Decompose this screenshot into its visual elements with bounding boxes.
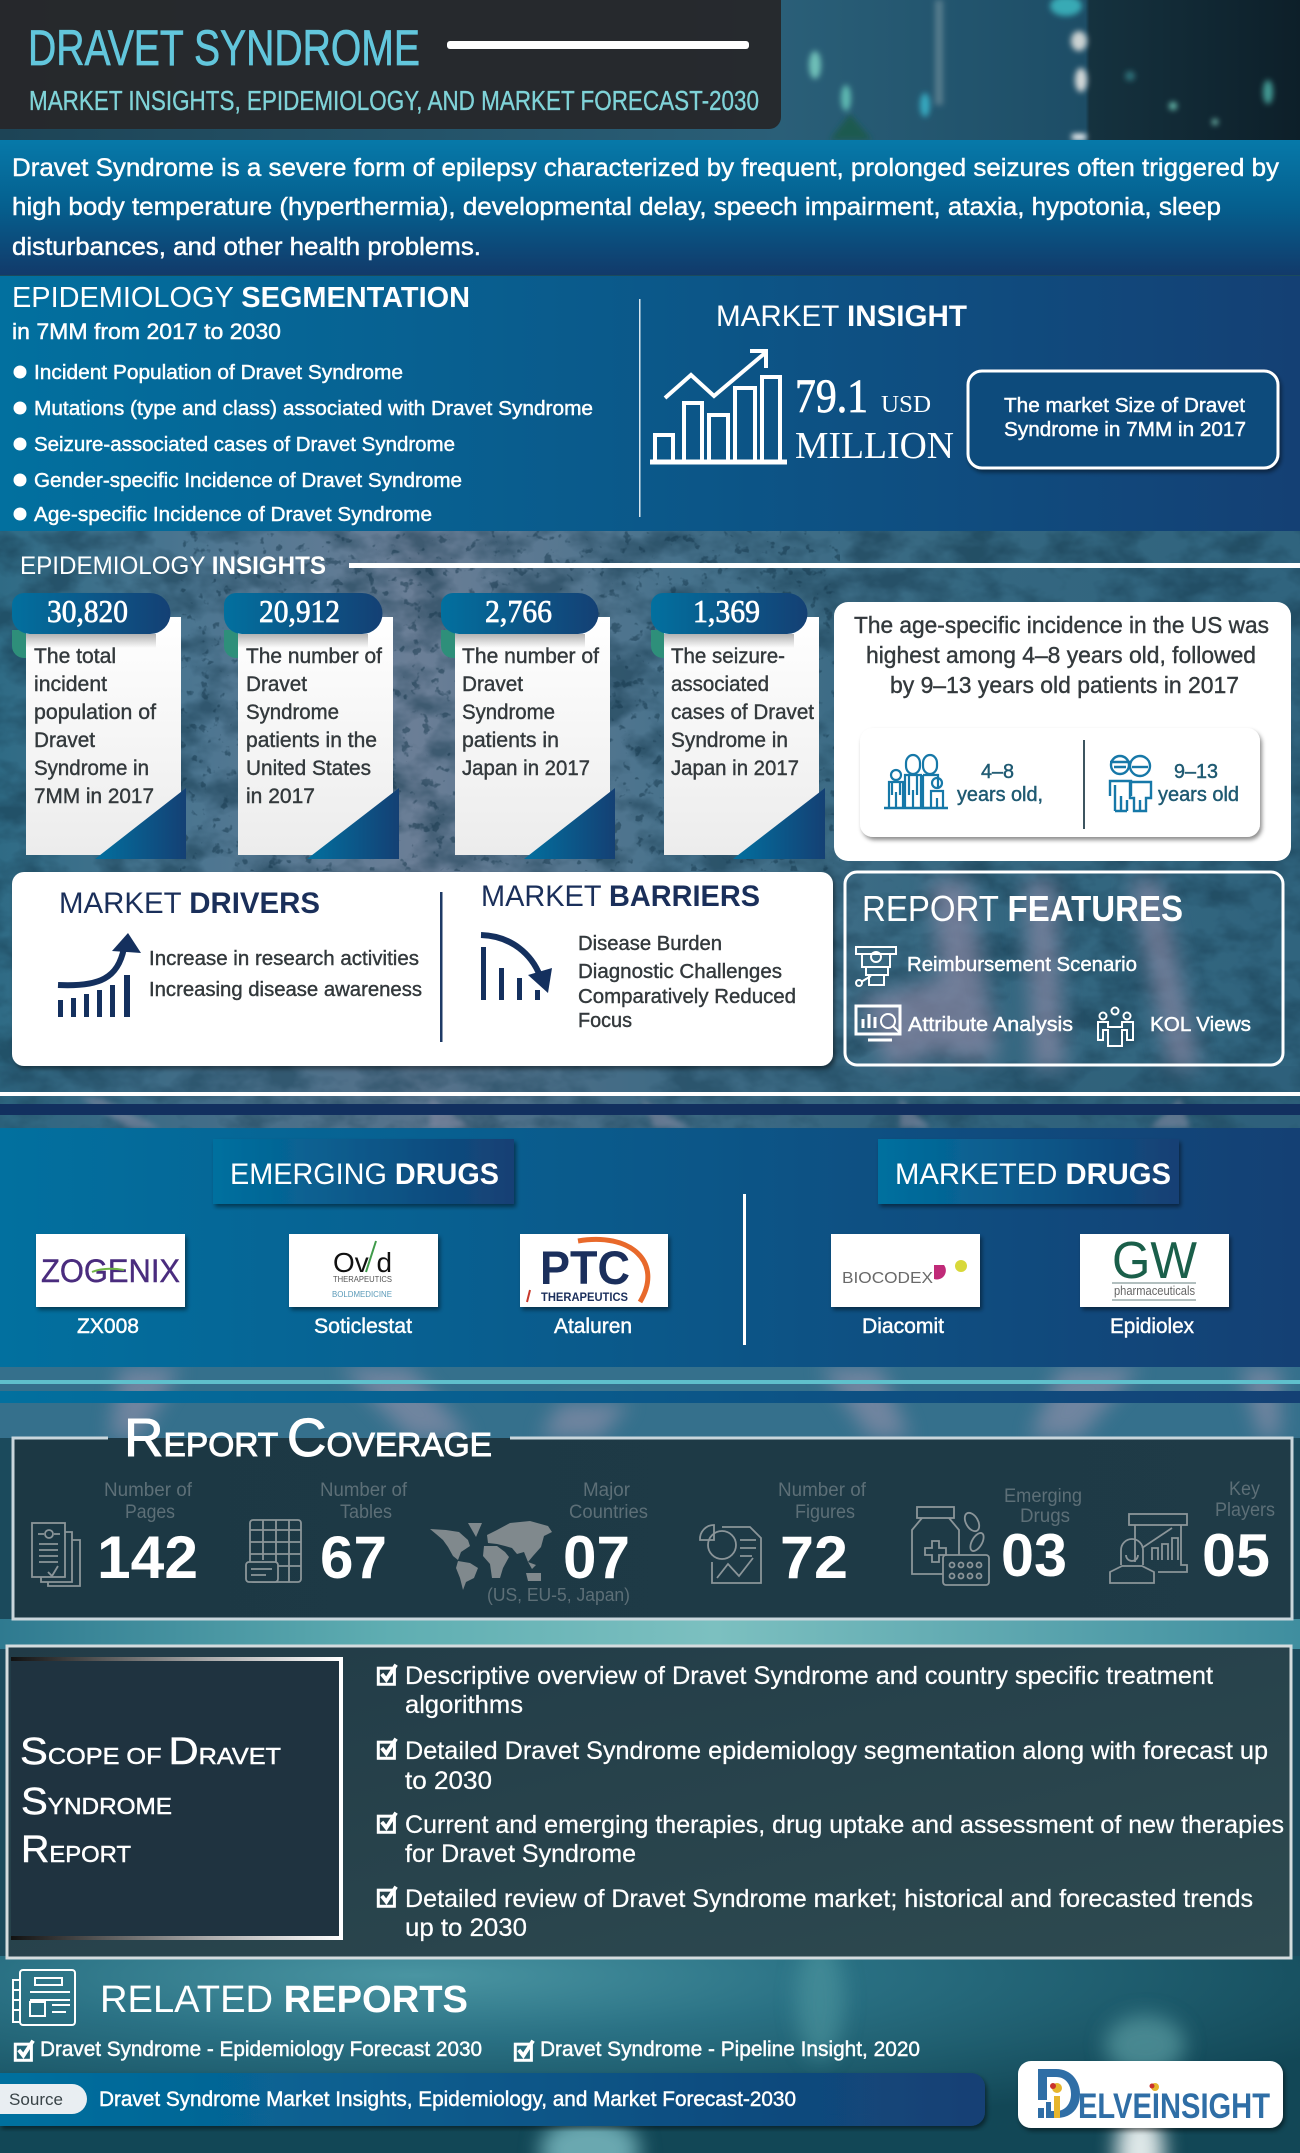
callout: market size: The market Size of Dravet xyxy=(1004,395,1245,417)
header panel xyxy=(0,0,781,129)
icon: kol xyxy=(1098,1008,1133,1046)
panel: report coverage xyxy=(13,1408,1292,1619)
heading: report features: REPORT FEATURES xyxy=(862,888,1183,929)
stat: figures: Figures xyxy=(795,1502,855,1523)
label: 4-8 xyxy=(957,761,1043,806)
stat: pages: 142 xyxy=(97,1524,198,1591)
stat: emerging drugs: Drugs xyxy=(1020,1506,1070,1527)
source bar xyxy=(0,2073,985,2126)
barriers list: Disease Burden xyxy=(578,933,722,955)
card: 1,369 xyxy=(651,593,825,859)
logo: ovid xyxy=(289,1234,438,1307)
stat: tables: Tables xyxy=(340,1502,392,1523)
icon: rising arrow xyxy=(58,933,141,1017)
panel: definition: disturbances, and other health problems. xyxy=(12,233,481,261)
scope list: Descriptive overview of Dravet Syndrome and country specific treatment xyxy=(405,1662,1213,1690)
heading: emerging drugs: EMERGING DRUGS xyxy=(230,1158,499,1191)
card: 30,820: Dravet xyxy=(34,729,95,752)
logo: gw pharmaceuticals: GW xyxy=(1112,1232,1197,1290)
card: 1,369: The seizure- xyxy=(671,645,785,668)
label: 4-8: years old, xyxy=(957,784,1043,806)
subheading: in 7MM from 2017 to 2030 xyxy=(12,319,281,344)
stat: tables xyxy=(246,1480,408,1591)
stat: tables: Number of xyxy=(320,1480,408,1501)
panel: market drivers and barriers xyxy=(12,872,833,1066)
bullet list xyxy=(14,362,593,526)
card: 1,369: associated xyxy=(671,673,769,696)
related report links xyxy=(15,2038,920,2061)
market value: MILLION xyxy=(795,425,954,467)
scope title box: REPORT xyxy=(21,1829,131,1871)
drivers list xyxy=(149,948,422,1001)
card: 20,912: 20,912 xyxy=(259,593,340,629)
logo: biocodex: BIOCODEX xyxy=(842,1270,933,1287)
heading: related reports: RELATED REPORTS xyxy=(100,1979,468,2021)
label: diacomit: Diacomit xyxy=(862,1315,944,1338)
callout: market size xyxy=(968,371,1278,468)
scope list: up to 2030 xyxy=(405,1914,527,1942)
card: 20,912: in 2017 xyxy=(246,785,315,808)
barriers list: Focus xyxy=(578,1010,632,1032)
market value: USD xyxy=(881,392,931,418)
barriers list: Comparatively Reduced xyxy=(578,986,796,1008)
stat: emerging drugs: 03 xyxy=(1001,1522,1067,1589)
heading: market drivers: MARKET DRIVERS xyxy=(59,887,320,920)
callout: market size: Syndrome in 7MM in 2017 xyxy=(1004,419,1246,441)
stat: figures: 72 xyxy=(780,1524,848,1591)
stat: pages: Pages xyxy=(125,1502,175,1523)
logo: biocodex xyxy=(831,1234,980,1307)
card: 20,912: United States xyxy=(246,757,371,780)
barriers list xyxy=(578,933,796,1032)
card: 2,766 xyxy=(441,593,615,859)
source bar: Source xyxy=(9,2090,63,2109)
label: soticlestat: Soticlestat xyxy=(314,1315,412,1338)
card: 2,766: patients in xyxy=(462,729,559,752)
logo: ptc xyxy=(520,1234,668,1307)
stat: pages: Number of xyxy=(104,1480,193,1501)
subtitle: MARKET INSIGHTS, EPIDEMIOLOGY, AND MARKET FORECAST-2030 xyxy=(29,85,759,116)
label: attribute analysis: Attribute Analysis xyxy=(908,1014,1073,1036)
card: 20,912 xyxy=(224,593,399,859)
panel: scope of report xyxy=(7,1646,1291,1958)
card: 20,912: Dravet xyxy=(246,673,307,696)
icon: falling arrow xyxy=(481,935,552,1000)
label: 9-13: years old xyxy=(1158,784,1239,806)
stat: major countries: (US, EU-5, Japan) xyxy=(487,1585,630,1605)
icon: family xyxy=(884,755,948,808)
card: 2,766: Japan in 2017 xyxy=(462,757,590,780)
heading: report coverage: REPORT COVERAGE xyxy=(124,1408,492,1468)
card: 1,369: Japan in 2017 xyxy=(671,757,799,780)
stat: key players: 05 xyxy=(1202,1522,1270,1589)
logo: ptc: PTC xyxy=(540,1241,630,1294)
card: 1,369: cases of Dravet xyxy=(671,701,814,724)
panel: drugs xyxy=(0,1128,1300,1367)
panel: age-specific incidence: The age-specific incidence in the US was xyxy=(854,612,1269,638)
heading: market insight: MARKET INSIGHT xyxy=(716,300,967,333)
logo: zogenix: ZOGENIX xyxy=(41,1253,180,1289)
card: 30,820: The total xyxy=(34,645,116,668)
scope list: to 2030 xyxy=(405,1767,492,1795)
title: DRAVET SYNDROME xyxy=(28,20,420,76)
card: 1,369: 1,369 xyxy=(693,593,760,629)
card: 2,766: The number of xyxy=(462,645,599,668)
card: 2,766: Syndrome xyxy=(462,701,555,724)
icon: related reports xyxy=(13,1970,75,2025)
stat: major countries xyxy=(430,1480,648,1605)
heading: marketed drugs xyxy=(878,1139,1179,1204)
panel: report features xyxy=(845,872,1283,1065)
label: ataluren: Ataluren xyxy=(554,1315,632,1338)
panel: age-specific incidence: by 9–13 years old patients in 2017 xyxy=(890,672,1239,698)
card: 30,820: 30,820 xyxy=(47,593,128,629)
stat: emerging drugs xyxy=(912,1486,1082,1589)
stat: figures xyxy=(700,1480,867,1591)
bullet list: Age-specific Incidence of Dravet Syndrome xyxy=(34,504,432,526)
heading: epidemiology segmentation: EPIDEMIOLOGY SEGMENTATION xyxy=(12,282,470,314)
panel: age-specific incidence: highest among 4–8 years old, followed xyxy=(866,642,1256,668)
heading: marketed drugs: MARKETED DRUGS xyxy=(895,1158,1171,1191)
scope list: Detailed review of Dravet Syndrome market; historical and forecasted trends xyxy=(405,1885,1253,1913)
icon: older couple xyxy=(1110,756,1151,811)
heading: market barriers: MARKET BARRIERS xyxy=(481,880,760,913)
stat: pages xyxy=(32,1480,198,1591)
logo: delveinsight xyxy=(1018,2061,1283,2128)
label: kol views: KOL Views xyxy=(1150,1014,1251,1036)
card: 30,820: incident xyxy=(34,673,107,696)
card: 30,820: population of xyxy=(34,701,156,724)
card: 20,912: patients in the xyxy=(246,729,377,752)
card: 30,820: Syndrome in xyxy=(34,757,149,780)
panel: definition xyxy=(0,140,1300,275)
scope title box: SCOPE OF DRAVET xyxy=(20,1731,281,1773)
heading: emerging drugs xyxy=(213,1139,514,1204)
stat: key players: Key xyxy=(1229,1479,1260,1500)
heading: epidemiology insights xyxy=(20,552,1300,580)
bullet list: Seizure-associated cases of Dravet Syndrome xyxy=(34,434,455,456)
logo: ovid: BOLDMEDICINE xyxy=(332,1290,392,1299)
label: 9-13 xyxy=(1158,761,1239,806)
stat: major countries: 07 xyxy=(563,1524,630,1591)
scope title box: SYNDROME xyxy=(21,1781,172,1823)
logo: zogenix xyxy=(36,1234,185,1307)
card: 1,369: Syndrome in xyxy=(671,729,788,752)
scope title box xyxy=(11,1657,342,1940)
bullet list: Mutations (type and class) associated with Dravet Syndrome xyxy=(34,398,593,420)
icon: attribute analysis xyxy=(856,1006,900,1040)
scope list: algorithms xyxy=(405,1691,523,1719)
label: 4-8: 4–8 xyxy=(981,761,1014,783)
card: 30,820 xyxy=(12,593,186,859)
bullet list: Incident Population of Dravet Syndrome xyxy=(34,362,403,384)
source bar: Dravet Syndrome Market Insights, Epidemiology, and Market Forecast-2030 xyxy=(99,2088,796,2111)
stat: emerging drugs: Emerging xyxy=(1004,1486,1082,1507)
panel: age-specific incidence xyxy=(834,602,1291,861)
logo: gw pharmaceuticals xyxy=(1080,1232,1229,1307)
icon: reimbursement xyxy=(856,947,896,986)
label: zx008: ZX008 xyxy=(77,1315,139,1338)
card: 30,820: 7MM in 2017 xyxy=(34,785,154,808)
scope list: Current and emerging therapies, drug uptake and assessment of new therapies xyxy=(405,1811,1284,1839)
label: 9-13: 9–13 xyxy=(1174,761,1218,783)
related report links: Dravet Syndrome - Pipeline Insight, 2020 xyxy=(540,2038,920,2061)
stat: major countries: Countries xyxy=(569,1502,648,1523)
heading: epidemiology insights: EPIDEMIOLOGY INSIGHTS xyxy=(20,552,326,580)
stat: major countries: Major xyxy=(583,1480,631,1501)
drivers list: Increase in research activities xyxy=(149,948,419,970)
card: 2,766: Dravet xyxy=(462,673,523,696)
scope list: Detailed Dravet Syndrome epidemiology segmentation along with forecast up xyxy=(405,1737,1268,1765)
label: reimbursement: Reimbursement Scenario xyxy=(907,954,1137,976)
logo: ptc: THERAPEUTICS xyxy=(541,1290,628,1304)
panel: definition: high body temperature (hyperthermia), developmental delay, speech impairment, ataxia, hypotonia, sleep xyxy=(12,193,1221,221)
logo: ovid: Ov d xyxy=(333,1247,392,1278)
icon: growth chart xyxy=(650,351,787,462)
logo: gw pharmaceuticals: pharmaceuticals xyxy=(1114,1283,1195,1298)
stat: figures: Number of xyxy=(778,1480,867,1501)
market value xyxy=(795,370,954,467)
logo: ovid: THERAPEUTICS xyxy=(333,1275,392,1284)
panel: definition: Dravet Syndrome is a severe form of epilepsy characterized by frequent, prolonged seizures often triggered by xyxy=(12,154,1280,182)
drivers list: Increasing disease awareness xyxy=(149,979,422,1001)
card: 20,912: The number of xyxy=(246,645,382,668)
scope list: for Dravet Syndrome xyxy=(405,1840,636,1868)
bullet list: Gender-specific Incidence of Dravet Syndrome xyxy=(34,470,462,492)
age groups box xyxy=(860,728,1260,837)
market value: 79.1 xyxy=(795,370,868,423)
label: epidiolex: Epidiolex xyxy=(1110,1315,1194,1338)
card: 2,766: 2,766 xyxy=(485,593,552,629)
title rule xyxy=(447,41,749,49)
scope list xyxy=(378,1662,1284,1942)
card: 20,912: Syndrome xyxy=(246,701,339,724)
stat: key players xyxy=(1110,1479,1275,1589)
panel: segmentation and market insight xyxy=(0,276,1300,531)
barriers list: Diagnostic Challenges xyxy=(578,961,782,983)
related report links: Dravet Syndrome - Epidemiology Forecast 2030 xyxy=(40,2038,482,2061)
stat: key players: Players xyxy=(1215,1500,1275,1521)
stat: tables: 67 xyxy=(320,1524,387,1591)
